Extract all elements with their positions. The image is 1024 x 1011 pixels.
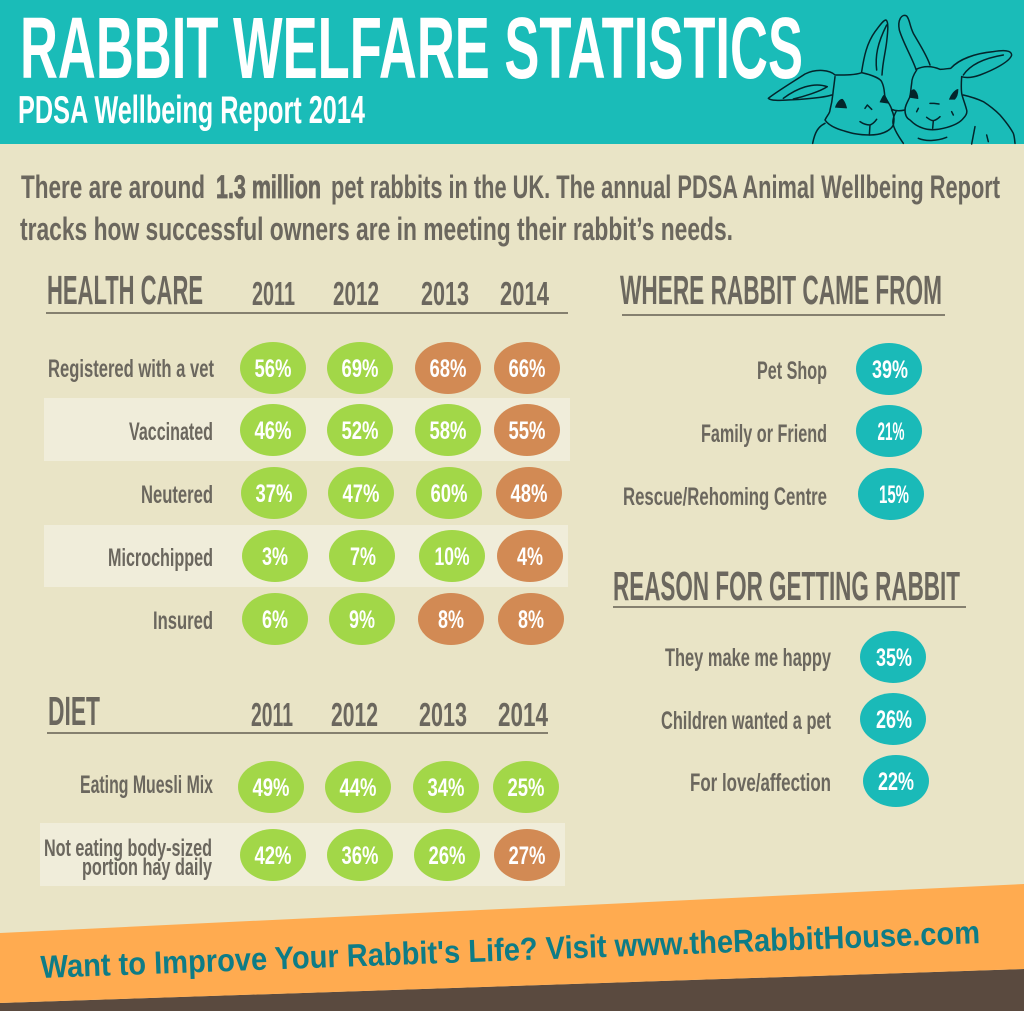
row bands (44, 398, 570, 587)
row: not eating hay: portion hay daily (82, 854, 212, 881)
year headers: health care (252, 275, 549, 312)
year headers: diet: 2011 (251, 696, 293, 733)
year headers: health care: 2013 (421, 275, 469, 312)
row: microchipped: 4% (517, 543, 543, 571)
row: not eating hay (44, 829, 560, 881)
subtitle: PDSA Wellbeing Report 2014 (18, 89, 365, 132)
year headers: health care: 2011 (252, 275, 295, 312)
row: vaccinated: 46% (254, 417, 292, 445)
row: not eating hay: 26% (428, 842, 466, 870)
row: eating muesli mix (80, 761, 559, 813)
header banner (0, 0, 1024, 144)
year headers: diet (251, 696, 548, 733)
heading: health care: HEALTH CARE (47, 267, 203, 313)
row: pet shop: 39% (872, 356, 908, 384)
row: insured: 6% (262, 606, 288, 634)
heading: diet: DIET (48, 688, 100, 734)
intro text: 1.3 million (216, 169, 321, 205)
row: not eating hay: Not eating body-sized (44, 835, 212, 862)
row: rescue centre: 15% (879, 481, 909, 509)
row: eating muesli mix: 25% (508, 774, 544, 802)
row: not eating hay: 42% (254, 842, 292, 870)
row: microchipped: Microchipped (108, 544, 213, 572)
row: family or friend: 21% (878, 418, 904, 446)
row: pet shop: Pet Shop (757, 357, 827, 385)
year headers: health care: 2012 (333, 275, 379, 312)
row: insured: 9% (349, 606, 375, 634)
row: family or friend (701, 405, 922, 457)
row: pet shop (757, 343, 922, 395)
row: not eating hay: 27% (508, 842, 546, 870)
row: not eating hay: 36% (342, 842, 378, 870)
row: eating muesli mix: 34% (428, 774, 464, 802)
row: for love/affection: For love/affection (690, 769, 831, 797)
row: children wanted a pet (661, 693, 926, 745)
row: insured: 8% (438, 606, 464, 634)
row: vaccinated: 52% (342, 417, 378, 445)
row: eating muesli mix: 44% (340, 774, 376, 802)
row: neutered: 47% (342, 480, 380, 508)
row: insured: 8% (518, 606, 544, 634)
row: registered with a vet: Registered with a vet (48, 355, 214, 383)
row: registered with a vet (48, 342, 560, 394)
row: neutered (141, 467, 562, 519)
row: rescue centre: Rescue/Rehoming Centre (623, 483, 827, 511)
row: they make me happy: They make me happy (665, 644, 831, 672)
row: neutered: 60% (430, 480, 468, 508)
row: neutered: 48% (510, 480, 548, 508)
row: neutered: Neutered (141, 481, 213, 509)
intro text (20, 169, 1000, 247)
intro text: There are around (21, 169, 205, 205)
row: eating muesli mix: 49% (252, 774, 290, 802)
row: family or friend: Family or Friend (701, 420, 827, 448)
panel: diet (40, 688, 565, 886)
year headers: diet: 2014 (498, 696, 548, 733)
row: neutered: 37% (256, 480, 292, 508)
row band (40, 823, 565, 886)
row: they make me happy (665, 631, 926, 683)
row: microchipped: 7% (350, 543, 376, 571)
row: microchipped: 3% (262, 543, 288, 571)
row: registered with a vet: 68% (430, 355, 466, 383)
footer dark strip (0, 969, 1024, 1011)
icon: two rabbits line drawing (768, 15, 1015, 144)
row: microchipped (108, 530, 563, 582)
row: registered with a vet: 69% (342, 355, 378, 383)
row: vaccinated: Vaccinated (129, 418, 213, 446)
year headers: diet: 2012 (331, 696, 378, 733)
row: insured: Insured (153, 607, 213, 635)
row: children wanted a pet: Children wanted a pet (661, 707, 831, 735)
intro text: tracks how successful owners are in meeting their rabbit’s needs. (20, 211, 733, 247)
row: registered with a vet: 66% (508, 355, 546, 383)
row: they make me happy: 35% (876, 644, 912, 672)
row: microchipped: 10% (434, 543, 470, 571)
row: children wanted a pet: 26% (876, 706, 912, 734)
row: insured (153, 593, 564, 645)
year headers: health care: 2014 (500, 275, 549, 312)
row: rescue centre (623, 468, 924, 520)
row: for love/affection: 22% (878, 768, 914, 796)
row: vaccinated: 58% (430, 417, 466, 445)
year headers: diet: 2013 (419, 696, 467, 733)
row: vaccinated: 55% (508, 417, 546, 445)
row: registered with a vet: 56% (254, 355, 292, 383)
footer orange banner (0, 884, 1024, 1003)
panel: where rabbit came from (620, 267, 945, 520)
row: for love/affection (690, 755, 929, 807)
panel: reason for getting rabbit (613, 563, 966, 807)
panel: health care (44, 267, 570, 645)
row: vaccinated (129, 404, 560, 456)
row: eating muesli mix: Eating Muesli Mix (80, 771, 213, 799)
